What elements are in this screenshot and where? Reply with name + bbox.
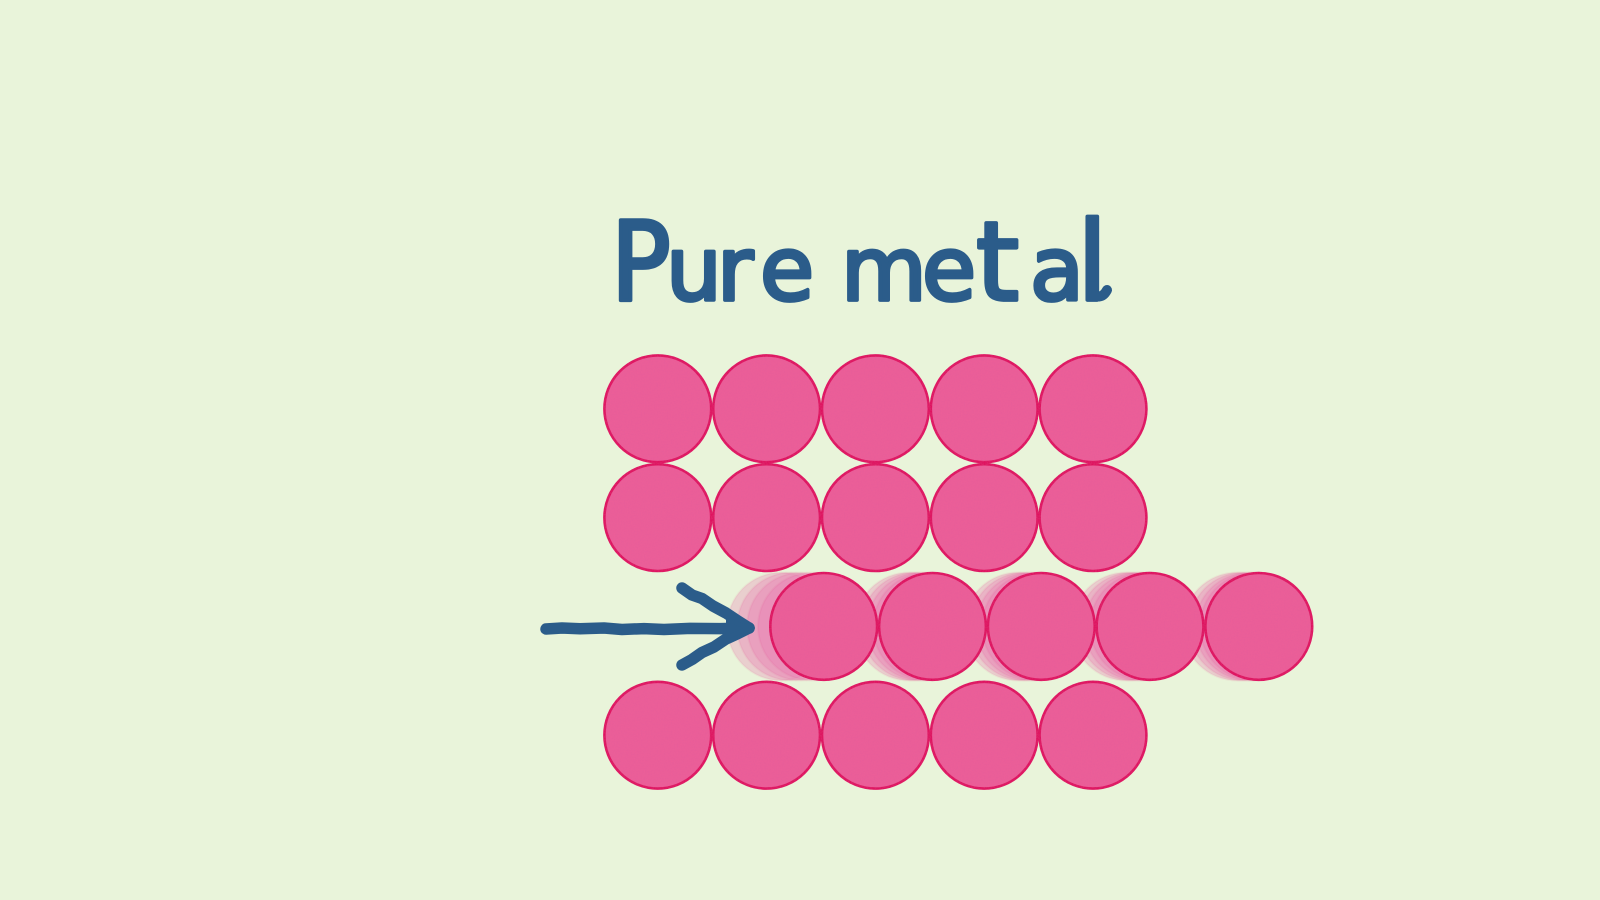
atoms: row 2 [604,464,1146,571]
title: Pure metal: l [1077,198,1108,326]
arrow: force pushing row 3 [546,588,749,665]
title: Pure metal: ure [666,218,814,321]
title: Pure metal: t [976,198,1019,326]
atoms: row 4 [604,682,1146,789]
title: Pure metal [611,198,1108,326]
atoms: row 3 shifted to the right [770,573,1312,680]
motion trail behind sliding row [727,572,1308,680]
atoms: row 1 [604,355,1146,462]
title: Pure metal: P [611,198,671,326]
title: Pure metal: a [1030,218,1084,321]
title: Pure metal: me [841,218,976,321]
